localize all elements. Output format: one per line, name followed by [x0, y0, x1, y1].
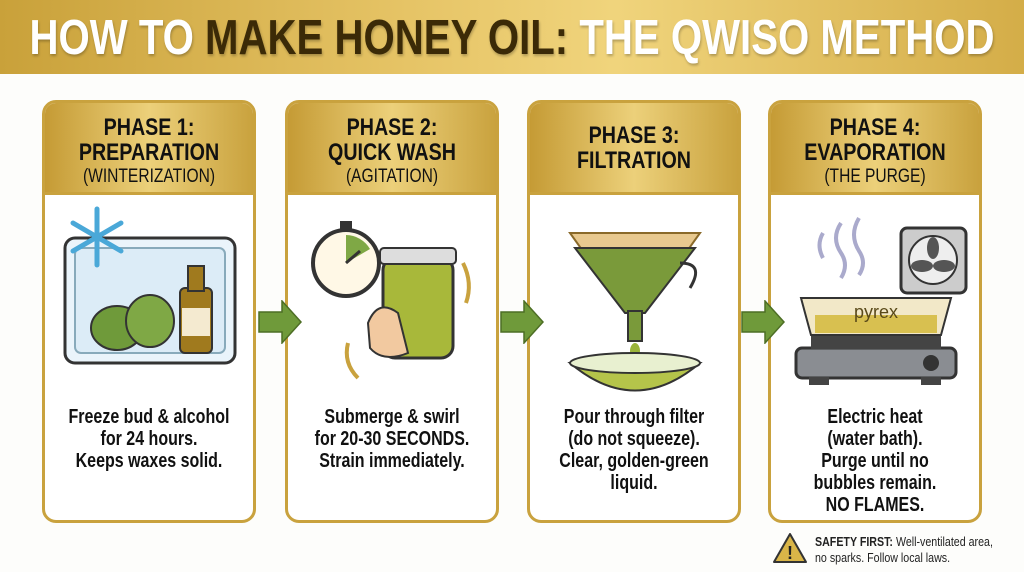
panel: phase 2 — [285, 100, 499, 523]
header band — [0, 0, 1024, 74]
safety text: SAFETY FIRST: Well-ventilated area, — [815, 534, 993, 549]
phase 4 heading — [771, 103, 979, 195]
phase 3 text: liquid. — [610, 472, 658, 494]
arrow 1 — [258, 300, 302, 344]
phase 1 text: for 24 hours. — [101, 428, 197, 450]
panel: phase 1 — [42, 100, 256, 523]
icon: stopwatch and jar — [311, 221, 471, 380]
phase 3 heading: FILTRATION — [577, 147, 691, 174]
phase 2 heading — [288, 103, 496, 195]
phase 2 heading: PHASE 2: — [347, 114, 437, 141]
panel: phase 4 — [768, 100, 982, 523]
arrow 2 — [500, 300, 544, 344]
arrow 3 — [741, 300, 785, 344]
phase 4 text — [814, 406, 936, 516]
phase 2 text: Submerge & swirl — [324, 406, 460, 428]
phase 1 text: Freeze bud & alcohol — [69, 406, 229, 428]
phase 4 text: NO FLAMES. — [826, 494, 924, 516]
phase 4 heading: EVAPORATION — [804, 139, 946, 166]
icon: pyrex dish on hot plate with fan: pyrex — [854, 302, 898, 322]
phase 4 text: bubbles remain. — [814, 472, 936, 494]
phase 3 text: (do not squeeze). — [568, 428, 700, 450]
icon: warning triangle: ! — [787, 543, 793, 563]
phase 3 heading — [530, 103, 738, 195]
icon: freezer with bud and bottle — [64, 206, 236, 364]
phase 1 text: Keeps waxes solid. — [76, 450, 222, 472]
phase 4 heading: PHASE 4: — [830, 114, 920, 141]
safety text: no sparks. Follow local laws. — [815, 550, 950, 565]
phase 4 text: Electric heat — [827, 406, 923, 428]
phase 3 text: Pour through filter — [564, 406, 704, 428]
phase 1 heading — [45, 103, 253, 195]
phase 3 text: Clear, golden-green — [559, 450, 709, 472]
safety text — [815, 534, 993, 565]
phase 4 text: (water bath). — [827, 428, 923, 450]
phase 3 text — [559, 406, 709, 494]
icon: warning triangle — [773, 533, 807, 563]
phase 2 text — [314, 406, 469, 472]
phase 2 text: for 20-30 SECONDS. — [315, 428, 469, 450]
phase 2 heading: (AGITATION) — [346, 166, 438, 187]
phase 3 heading: PHASE 3: — [589, 122, 679, 149]
title: HOW TO MAKE HONEY OIL: THE QWISO METHOD — [29, 11, 995, 65]
icon: funnel with filter over bowl — [567, 232, 703, 392]
phase 1 heading: PHASE 1: — [104, 114, 194, 141]
phase 4 heading: (THE PURGE) — [824, 166, 926, 187]
safety note — [773, 533, 993, 565]
phase 2 text: Strain immediately. — [319, 450, 465, 472]
phase 1 text — [69, 406, 229, 472]
phase 2 heading: QUICK WASH — [328, 139, 456, 166]
phase 1 heading: (WINTERIZATION) — [83, 166, 215, 187]
phase 4 text: Purge until no — [821, 450, 929, 472]
phase 1 heading: PREPARATION — [79, 139, 219, 166]
panel: phase 3 — [527, 100, 741, 523]
icon: pyrex dish on hot plate with fan — [794, 217, 968, 385]
